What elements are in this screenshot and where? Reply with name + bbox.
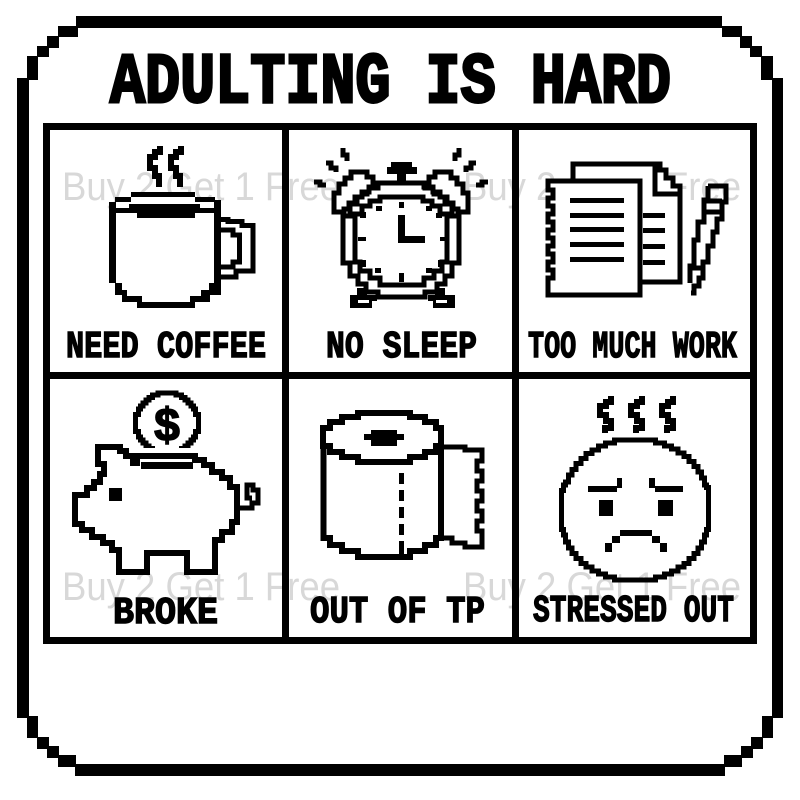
icon: stacked papers — [548, 164, 680, 295]
icon: piggy bank with coin: $ — [153, 402, 181, 454]
panel: no sleep — [314, 148, 488, 369]
icon: ringing alarm clock — [314, 148, 488, 308]
label: broke: BROKE — [113, 592, 218, 635]
label: out of tp: OUT OF TP — [310, 591, 485, 634]
icon: toilet paper roll — [323, 413, 482, 557]
icon: worried face — [562, 440, 708, 580]
six-cell grid — [43, 123, 757, 644]
icon: pencil — [690, 186, 726, 293]
panel: stressed out — [533, 396, 734, 633]
panel: broke — [75, 393, 258, 635]
icon: piggy bank with coin — [75, 393, 258, 572]
title: ADULTING IS HARD — [110, 44, 671, 124]
icon: steaming coffee mug — [109, 146, 253, 308]
panel: out of tp — [310, 413, 485, 634]
watermark: top left: Buy 2 Get 1 Free — [62, 165, 340, 209]
watermark: bottom left: Buy 2 Get 1 Free — [62, 565, 340, 609]
panel: need coffee — [66, 146, 266, 369]
label: need coffee: NEED COFFEE — [66, 326, 266, 369]
icon: stress squiggles — [600, 396, 673, 433]
label: no sleep: NO SLEEP — [326, 326, 477, 369]
label: stressed out: STRESSED OUT — [533, 590, 734, 633]
panel: too much work — [528, 164, 737, 369]
watermark: top right: Buy 2 Get 1 Free — [463, 165, 741, 209]
watermark: bottom right: Buy 2 Get 1 Free — [463, 565, 741, 609]
